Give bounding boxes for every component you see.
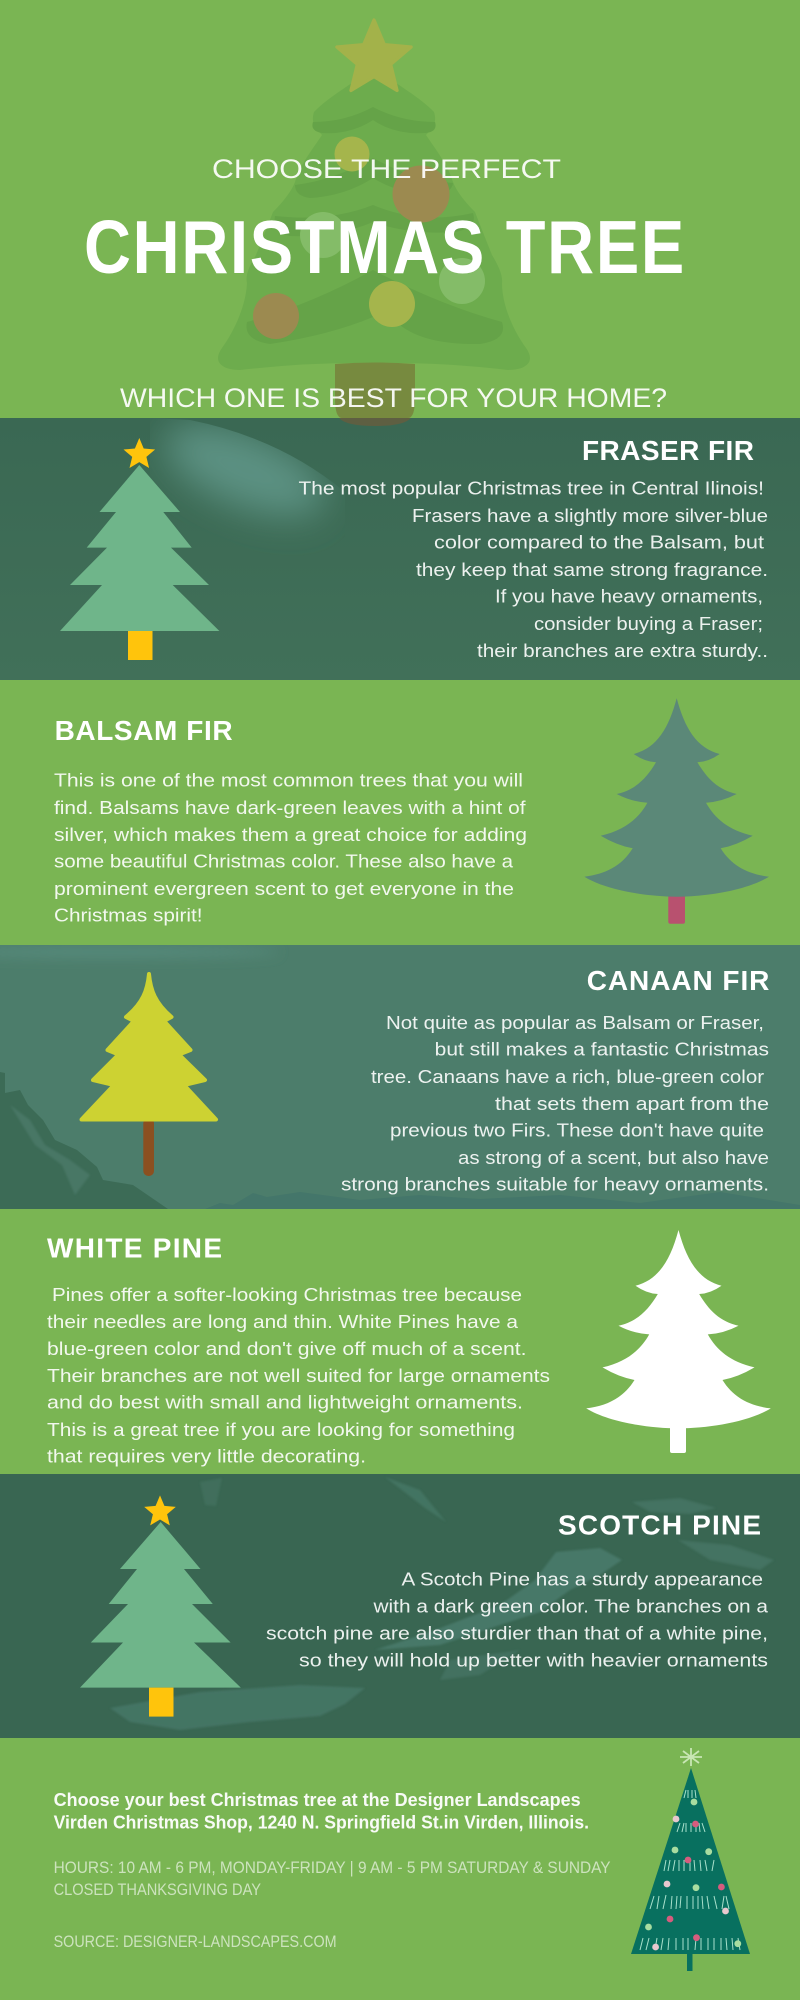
section: white pine	[47, 1230, 771, 1467]
title: choose the perfect: CHOOSE THE PERFECT	[212, 154, 561, 184]
icon: balsam tree	[584, 698, 769, 924]
text block: balsam fir: find. Balsams have dark-green leaves with a hint of	[54, 798, 527, 818]
text block: fraser fir: they keep that same strong fragrance.	[416, 560, 768, 580]
text block: fraser fir: color compared to the Balsam, but	[434, 532, 764, 552]
text block: balsam fir: This is one of the most common trees that you will	[54, 771, 523, 791]
tree star	[337, 20, 411, 90]
text block: canaan fir: previous two Firs. These don't have quite	[390, 1121, 764, 1141]
text block: balsam fir: silver, which makes them a great choice for adding	[54, 825, 527, 845]
text block: fraser fir	[298, 479, 768, 661]
text block: white pine: Their branches are not well suited for large ornaments	[47, 1366, 550, 1386]
panel: canaan fir background	[0, 945, 800, 1209]
panel: fraser fir background	[0, 405, 800, 680]
heading: balsam fir: BALSAM FIR	[55, 715, 233, 746]
heading: fraser fir: FRASER FIR	[582, 435, 754, 466]
footer	[54, 1748, 750, 1971]
icon: canaan tree	[82, 974, 216, 1176]
text block: canaan fir: Not quite as popular as Balsam or Fraser,	[386, 1013, 764, 1033]
text block: white pine	[47, 1285, 550, 1467]
icon: large faded christmas tree	[218, 20, 530, 426]
text block: white pine: that requires very little decorating.	[47, 1447, 366, 1467]
text block: balsam fir: some beautiful Christmas color. These also have a	[54, 852, 514, 872]
text block: white pine: blue-green color and don't give off much of a scent.	[47, 1339, 526, 1359]
section: canaan fir	[82, 965, 769, 1195]
hours	[54, 1859, 611, 1899]
text block: canaan fir: that sets them apart from the	[495, 1094, 769, 1114]
tree body	[218, 66, 530, 370]
call to action: Virden Christmas Shop, 1240 N. Springfield St.in Virden, Illinois.	[54, 1813, 589, 1833]
text block: white pine: This is a great tree if you are looking for something	[47, 1420, 515, 1440]
text block: fraser fir: The most popular Christmas tree in Central Ilinois!	[298, 479, 764, 499]
text block: fraser fir: their branches are extra sturdy..	[477, 641, 768, 661]
text block: scotch pine	[266, 1570, 769, 1671]
text block: canaan fir: strong branches suitable for heavy ornaments.	[341, 1175, 769, 1195]
icon: white pine tree	[586, 1230, 771, 1453]
text block: scotch pine: A Scotch Pine has a sturdy appearance	[402, 1570, 763, 1590]
heading: white pine: WHITE PINE	[47, 1232, 222, 1264]
text block: scotch pine: so they will hold up better with heavier ornaments	[299, 1651, 768, 1671]
text block: canaan fir: tree. Canaans have a rich, blue-green color	[371, 1067, 764, 1087]
heading: canaan fir: CANAAN FIR	[587, 965, 769, 996]
tree swags	[246, 107, 503, 344]
tree ornaments	[334, 136, 370, 172]
hours: CLOSED THANKSGIVING DAY	[54, 1881, 261, 1899]
call to action: Choose your best Christmas tree at the Designer Landscapes	[54, 1790, 581, 1810]
text block: white pine: and do best with small and lightweight ornaments.	[47, 1393, 523, 1413]
text block: fraser fir: If you have heavy ornaments,	[495, 587, 763, 607]
text block: balsam fir: Christmas spirit!	[54, 906, 202, 926]
source: SOURCE: DESIGNER-LANDSCAPES.COM	[54, 1933, 337, 1951]
icon: fraser tree	[60, 438, 219, 660]
text block: balsam fir	[54, 771, 527, 926]
text block: canaan fir: as strong of a scent, but also have	[458, 1148, 769, 1168]
text block: scotch pine: with a dark green color. The branches on a	[372, 1596, 769, 1616]
text block: scotch pine: scotch pine are also sturdier than that of a white pine,	[266, 1624, 768, 1644]
text block: white pine: their needles are long and thin. White Pines have a	[47, 1312, 519, 1332]
text block: white pine: Pines offer a softer-looking Christmas tree because	[52, 1285, 522, 1305]
text block: canaan fir	[341, 1013, 769, 1195]
panel: scotch pine background	[0, 1474, 800, 1738]
tree trunk	[335, 362, 415, 418]
text block: canaan fir: but still makes a fantastic Christmas	[435, 1040, 769, 1060]
text block: fraser fir: consider buying a Fraser;	[534, 614, 763, 634]
title: christmas tree: CHRISTMAS TREE	[84, 205, 686, 289]
text block: balsam fir: prominent evergreen scent to get everyone in the	[54, 879, 514, 899]
icon: scotch tree	[80, 1495, 241, 1717]
section: balsam fir	[54, 698, 769, 926]
section: scotch pine	[80, 1495, 769, 1717]
title block	[84, 154, 686, 413]
text block: fraser fir: Frasers have a slightly more silver-blue	[412, 506, 768, 526]
heading: scotch pine: SCOTCH PINE	[558, 1510, 761, 1541]
subtitle: WHICH ONE IS BEST FOR YOUR HOME?	[120, 383, 667, 413]
call to action	[54, 1790, 589, 1833]
icon: decorated tree	[631, 1748, 750, 1971]
section: fraser fir	[60, 435, 768, 661]
hours: HOURS: 10 AM - 6 PM, MONDAY-FRIDAY | 9 AM - 5 PM SATURDAY & SUNDAY	[54, 1859, 611, 1877]
